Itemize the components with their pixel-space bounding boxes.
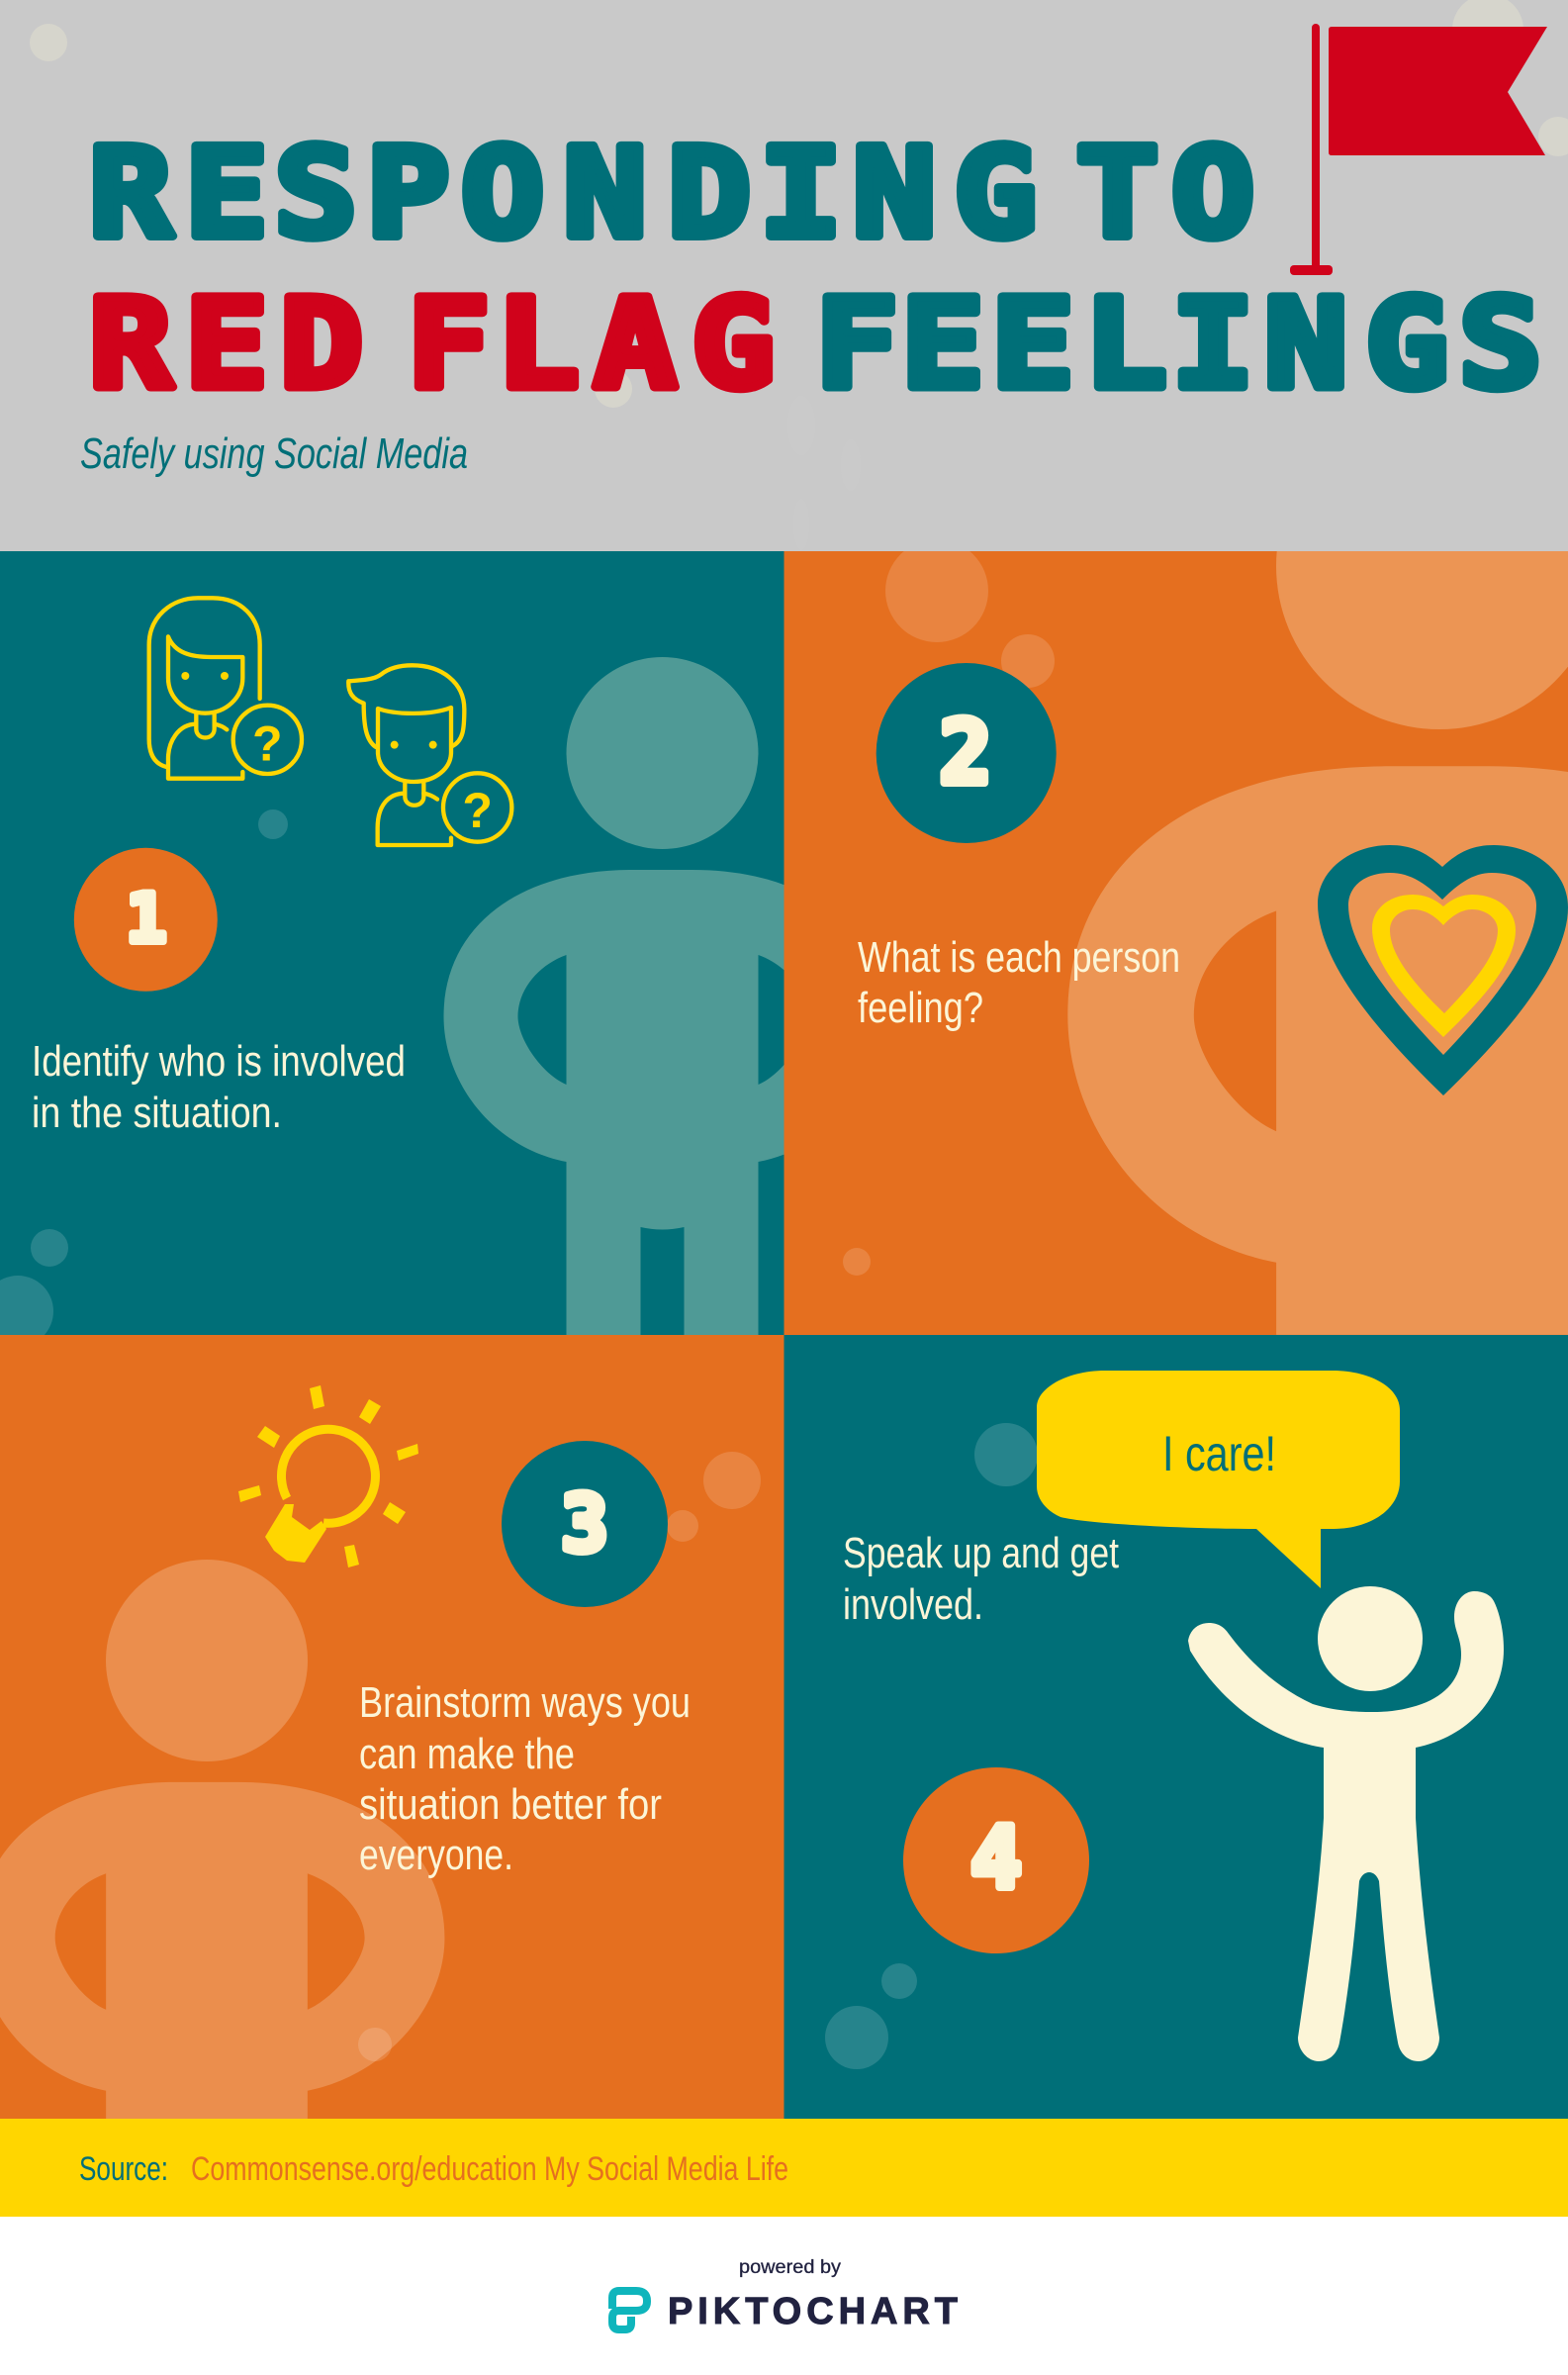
- icon: two people with question marks: ?: [462, 783, 493, 838]
- badge: number 3: [502, 1441, 668, 1607]
- text: step 3: Brainstorm ways you: [359, 1678, 691, 1727]
- text: subtitle: Safely using Social Media: [80, 429, 468, 478]
- text: step 2: What is each person: [858, 933, 1180, 982]
- text: step 1: [32, 1037, 406, 1137]
- panel: source bar: [0, 2119, 1568, 2217]
- panel: source bar: Commonsense.org/education My Social Media Life: [191, 2150, 788, 2188]
- heading: title: REDFLAG: [89, 273, 775, 417]
- badge: number 1: 1: [127, 881, 166, 958]
- badge: number 4: 4: [970, 1809, 1022, 1908]
- text: step 4: [843, 1529, 1119, 1629]
- icon: piktochart logo: [612, 2291, 647, 2329]
- badge: number 2: 2: [940, 702, 991, 804]
- icon: two people with question marks: [149, 598, 511, 845]
- badge: number 3: 3: [562, 1480, 607, 1569]
- text: step 2: [858, 933, 1180, 1032]
- badge: number 2: [876, 663, 1057, 843]
- heading: title: [89, 123, 1542, 417]
- text: step 1: in the situation.: [32, 1089, 282, 1137]
- text: step 3: situation better for: [359, 1780, 662, 1829]
- text: step 3: [359, 1678, 691, 1879]
- text: piktochart wordmark: PIKTOCHART: [668, 2291, 958, 2332]
- icon: nested hearts: [1318, 845, 1568, 1095]
- text: step 4: Speak up and get: [843, 1529, 1119, 1577]
- text: step 1: Identify who is involved: [32, 1037, 406, 1086]
- panel: header: [0, 0, 1568, 551]
- panel: step 3: [0, 1335, 784, 2119]
- callout: speech bubble: [1037, 1371, 1400, 1588]
- text: step 3: can make the: [359, 1730, 575, 1778]
- icon: light bulb: [238, 1385, 418, 1568]
- badge: number 4: [903, 1767, 1089, 1953]
- icon: red flag: [1290, 24, 1547, 275]
- panel: footer: [0, 2217, 1568, 2375]
- figure: person silhouette: [0, 1560, 444, 2119]
- panel: step 4: [784, 1335, 1568, 2119]
- heading: title: FEELINGS: [815, 273, 1542, 417]
- figure: person with raised arms: [1188, 1586, 1504, 2061]
- panel: step 1: [0, 551, 784, 1335]
- panel: step 2: [784, 551, 1568, 1335]
- panel: source bar: Source:: [79, 2150, 168, 2188]
- callout: speech bubble: I care!: [1162, 1426, 1276, 1481]
- text: step 2: feeling?: [858, 984, 983, 1032]
- text: step 4: involved.: [843, 1580, 983, 1629]
- figure: person silhouette: [1067, 403, 1568, 1335]
- heading: title: RESPONDINGTO: [89, 123, 1254, 266]
- icon: two people with question marks: ?: [252, 715, 283, 771]
- text: powered by: powered by: [739, 2257, 842, 2278]
- text: step 3: everyone.: [359, 1831, 513, 1879]
- badge: number 1: [74, 848, 218, 992]
- figure: person silhouette: [443, 657, 784, 1335]
